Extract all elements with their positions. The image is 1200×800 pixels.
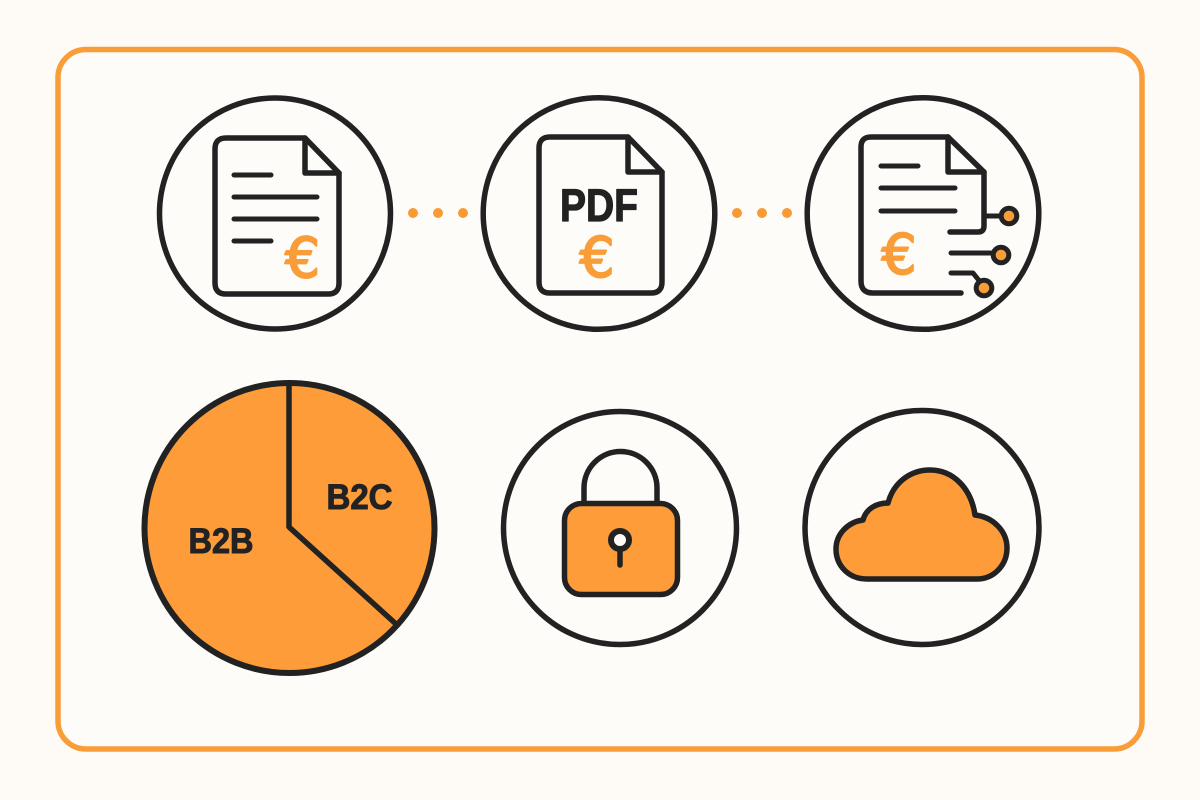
chart: B2B and B2C pie xyxy=(144,381,434,673)
icon: structured e-invoice in circle xyxy=(807,98,1039,329)
dotted connector 1 xyxy=(408,208,468,218)
label: PDF: PDF xyxy=(560,180,638,231)
icon: padlock in circle xyxy=(504,412,736,644)
dotted connector 2 xyxy=(732,208,792,218)
icon: euro sign: € xyxy=(580,226,614,290)
panel: outer frame xyxy=(58,50,1142,749)
icon: euro sign: € xyxy=(285,226,320,290)
icon: data nodes xyxy=(951,208,1017,296)
icon: invoice document in circle xyxy=(160,98,390,329)
label: B2C: B2C xyxy=(326,478,392,517)
icon: cloud in circle xyxy=(805,410,1039,644)
icon: PDF document in circle xyxy=(483,98,715,329)
label: B2B: B2B xyxy=(188,522,254,561)
icon: euro sign: € xyxy=(882,222,916,286)
